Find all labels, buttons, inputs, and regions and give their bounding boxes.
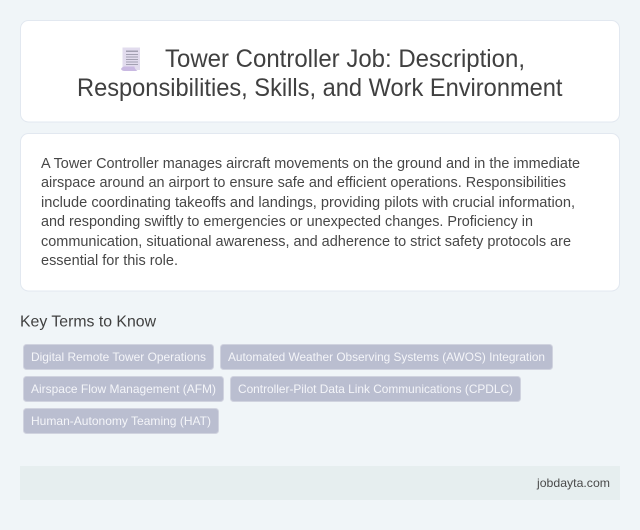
description text: airspace around an airport to ensure safe and efficient operations. Responsibilities	[41, 175, 566, 191]
tag list	[24, 344, 552, 434]
title: Responsibilities, Skills, and Work Environment	[77, 74, 563, 102]
tag: AWOS integration: Automated Weather Observing Systems (AWOS) Integration	[228, 350, 545, 364]
title	[77, 45, 563, 102]
tag: human-autonomy teaming: Human-Autonomy Teaming (HAT)	[31, 414, 211, 428]
title: Tower Controller Job: Description,	[165, 45, 525, 73]
icon: scroll document	[121, 48, 140, 71]
panel: title card	[20, 20, 620, 122]
tag: AWOS integration	[220, 344, 552, 370]
heading: key terms: Key Terms to Know	[20, 314, 156, 330]
tag: CPDLC: Controller-Pilot Data Link Communications (CPDLC)	[238, 382, 513, 396]
description text: communication, situational awareness, and adherence to strict safety protocols are	[41, 234, 571, 250]
tag: airspace flow management: Airspace Flow Management (AFM)	[31, 382, 216, 396]
panel: description	[20, 134, 620, 291]
description text	[41, 156, 580, 269]
description text: A Tower Controller manages aircraft movements on the ground and in the immediate	[41, 156, 580, 172]
tag: airspace flow management	[24, 376, 224, 402]
footer bar	[20, 466, 620, 500]
tag: CPDLC	[230, 376, 520, 402]
description text: essential for this role.	[41, 253, 178, 269]
footer source: jobdayta.com	[536, 476, 610, 490]
tag: digital remote tower operations	[24, 344, 214, 370]
description text: and responding swiftly to emergencies or unexpected changes. Proficiency in	[41, 214, 533, 230]
description text: include coordinating takeoffs and landings, providing pilots with crucial information,	[41, 195, 575, 211]
tag: human-autonomy teaming	[24, 408, 218, 434]
tag: digital remote tower operations: Digital Remote Tower Operations	[31, 350, 206, 364]
